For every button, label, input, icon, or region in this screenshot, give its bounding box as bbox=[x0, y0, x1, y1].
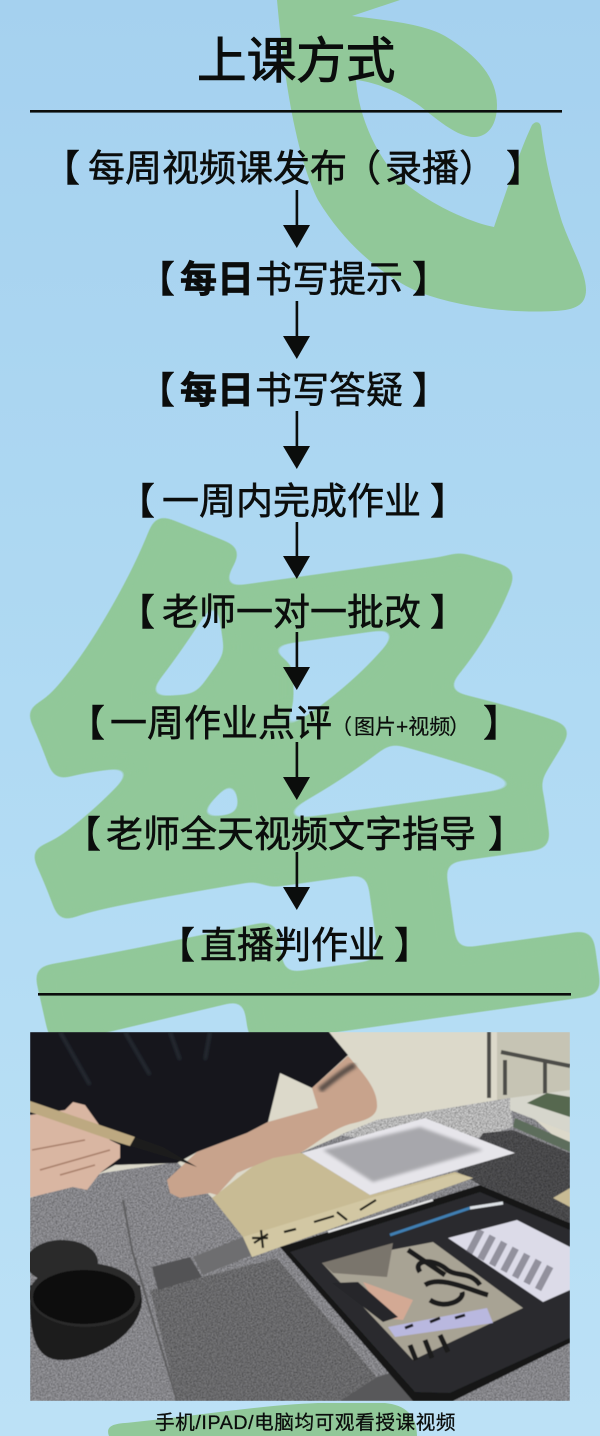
step 7: all-day guidance: 【 bbox=[64, 814, 101, 855]
right arm and hand bbox=[167, 1056, 377, 1198]
top divider bbox=[30, 110, 562, 113]
brush bbox=[30, 1101, 197, 1167]
title: 上课方式 bbox=[197, 33, 395, 89]
watermark: brush stroke at bottom bbox=[108, 1403, 417, 1436]
step 3: daily answers: 】 bbox=[412, 370, 449, 411]
step 6: weekly review: （ bbox=[331, 716, 352, 739]
step 2: daily prompt: 每日 bbox=[180, 259, 254, 300]
step 2: daily prompt bbox=[138, 259, 449, 300]
step 3: daily answers bbox=[138, 370, 449, 411]
step 1: weekly video: 】 bbox=[506, 148, 543, 189]
step 6: weekly review bbox=[68, 703, 520, 744]
ink box bbox=[29, 1263, 142, 1360]
step 8: live marking bbox=[158, 925, 431, 966]
step 1: weekly video: 录播 bbox=[385, 148, 459, 189]
step 6: weekly review: 一周作业点评 bbox=[110, 703, 332, 744]
sheet of reference text bbox=[302, 1118, 515, 1195]
photo: calligraphy practice with tablet bbox=[26, 1032, 570, 1401]
arrow 1 bbox=[283, 190, 310, 248]
step 2: daily prompt: 【 bbox=[138, 259, 175, 300]
step 3: daily answers: 【 bbox=[138, 370, 175, 411]
step 5: one-to-one correction: 老师一对一批改 bbox=[162, 592, 421, 633]
arrow 6 bbox=[283, 742, 310, 800]
watermark: large brush character bbox=[30, 518, 600, 1032]
step 7: all-day guidance: 老师全天视频文字指导 bbox=[106, 814, 476, 855]
step 4: homework: 】 bbox=[430, 481, 467, 522]
step 5: one-to-one correction: 】 bbox=[430, 592, 467, 633]
arrow 4 bbox=[283, 522, 310, 579]
step 4: homework: 【 bbox=[118, 481, 155, 522]
step 3: daily answers: 书写答疑 bbox=[255, 370, 403, 411]
step 6: weekly review: 【 bbox=[68, 703, 105, 744]
step 1: weekly video bbox=[43, 148, 543, 189]
step 8: live marking: 【 bbox=[158, 925, 195, 966]
arrow 5 bbox=[283, 632, 310, 690]
felt table bbox=[30, 1098, 570, 1401]
step 6: weekly review: ） bbox=[449, 716, 470, 739]
practice paper bbox=[212, 1152, 473, 1238]
step 3: daily answers: 每日 bbox=[180, 370, 254, 411]
watermark: brush stroke at top bbox=[277, 0, 586, 312]
left hand bbox=[30, 1102, 120, 1197]
bottom divider bbox=[38, 993, 571, 996]
step 8: live marking: 】 bbox=[394, 925, 431, 966]
arrow 7 bbox=[283, 852, 310, 910]
arrow 2 bbox=[283, 301, 310, 359]
step 1: weekly video: （ bbox=[344, 148, 381, 189]
step 7: all-day guidance: 】 bbox=[488, 814, 525, 855]
step 6: weekly review: 图片+视频 bbox=[354, 716, 450, 739]
step 5: one-to-one correction: 【 bbox=[118, 592, 155, 633]
books bbox=[510, 1090, 570, 1152]
step 1: weekly video: 【 bbox=[43, 148, 80, 189]
shirt bbox=[30, 1032, 348, 1174]
step 4: homework: 一周内完成作业 bbox=[162, 481, 421, 522]
step 1: weekly video: 每周视频课发布 bbox=[88, 148, 347, 189]
ink box lid bbox=[30, 1240, 98, 1278]
step 2: daily prompt: 书写提示 bbox=[255, 259, 403, 300]
step 1: weekly video: ） bbox=[459, 148, 496, 189]
arrow 3 bbox=[283, 411, 310, 469]
caption: 手机/IPAD/电脑均可观看授课视频 bbox=[155, 1412, 456, 1434]
step 6: weekly review: 】 bbox=[483, 703, 520, 744]
step 2: daily prompt: 】 bbox=[412, 259, 449, 300]
tablet bbox=[280, 1185, 570, 1401]
step 8: live marking: 直播判作业 bbox=[200, 925, 385, 966]
